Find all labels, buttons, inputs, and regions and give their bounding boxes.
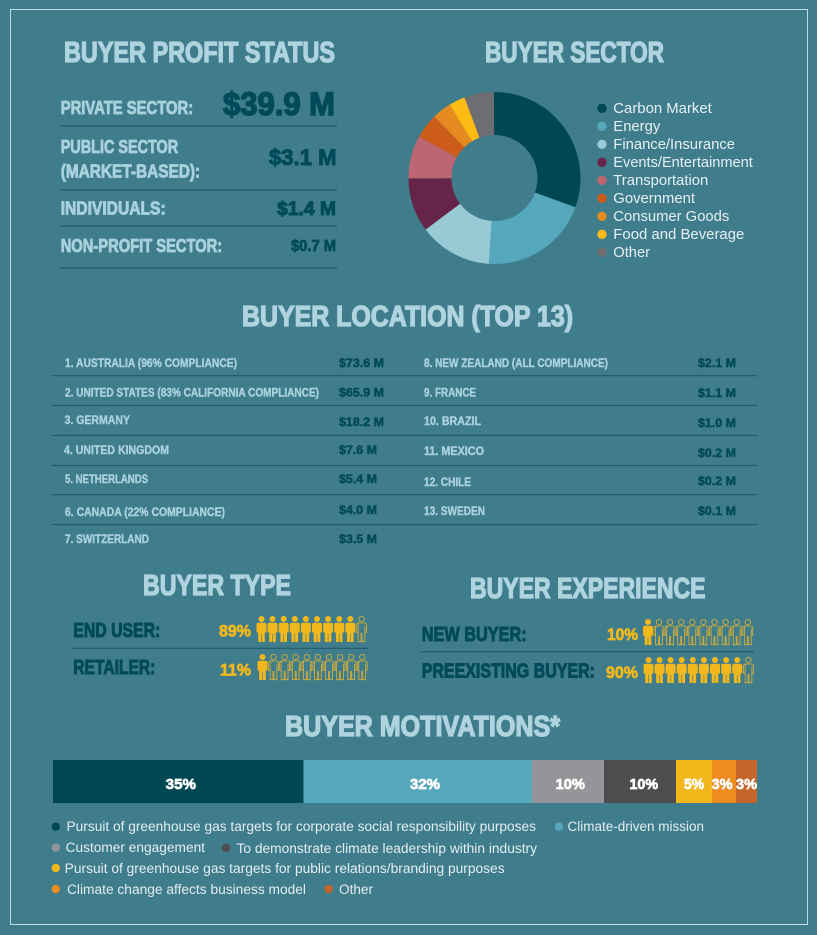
row: preexisting buyer: PREEXISTING BUYER: [422, 661, 595, 683]
legend: sectors: Government [613, 191, 695, 207]
list: countries 1 to 7: 1. AUSTRALIA (96% COMPLIANCE) [65, 358, 237, 370]
list: countries 1 to 7: $3.5 M [339, 532, 377, 546]
legend: sectors: Events/Entertainment [613, 155, 753, 171]
row: non-profit sector: NON-PROFIT SECTOR: [61, 235, 222, 256]
legend: sectors: Transportation [613, 173, 708, 189]
list: countries 1 to 7: 5. NETHERLANDS [65, 474, 148, 486]
heading: buyer experience: BUYER EXPERIENCE [470, 573, 706, 605]
list: countries 8 to 13: $1.0 M [698, 416, 736, 430]
list: countries 1 to 7: 6. CANADA (22% COMPLIANCE) [65, 507, 225, 519]
panel: buyer sector [430, 37, 753, 261]
heading: buyer type: BUYER TYPE [143, 570, 291, 602]
legend: sectors: Carbon Market [613, 101, 712, 117]
row: public sector [61, 136, 336, 182]
heading: buyer sector: BUYER SECTOR [485, 37, 664, 69]
list: countries 1 to 7: $4.0 M [339, 503, 377, 517]
list: countries 1 to 7: 7. SWITZERLAND [65, 534, 149, 546]
legend: sectors: Consumer Goods [613, 209, 729, 225]
legend: motivations: Pursuit of greenhouse gas targets for corporate social responsibility purposes [66, 819, 536, 834]
row: private sector: PRIVATE SECTOR: [61, 97, 193, 118]
row: end user: 89% [219, 622, 251, 641]
heading: buyer location: BUYER LOCATION (TOP 13) [242, 301, 573, 333]
row: individuals: $1.4 M [277, 198, 336, 220]
row: preexisting buyer [422, 657, 753, 683]
legend: motivations: Pursuit of greenhouse gas targets for public relations/branding purposes [65, 861, 505, 876]
row: retailer: 11% [220, 661, 251, 680]
panel: buyer experience [420, 573, 754, 683]
legend: motivations: Customer engagement [66, 840, 205, 855]
list: countries 8 to 13: $0.2 M [698, 474, 736, 488]
row: new buyer: 10% [607, 625, 638, 644]
stacked bar chart: 35% [166, 776, 196, 793]
row: public sector: PUBLIC SECTOR [61, 136, 178, 157]
panel: buyer motivations [52, 711, 757, 897]
stacked bar chart [53, 760, 757, 803]
row: new buyer: NEW BUYER: [422, 624, 527, 646]
row: individuals: INDIVIDUALS: [61, 198, 166, 219]
row: retailer [73, 654, 367, 680]
stacked bar chart: 3% [736, 776, 757, 793]
heading: buyer profit status: BUYER PROFIT STATUS [64, 37, 335, 69]
stacked bar chart: 10% [556, 776, 585, 793]
row: individuals [61, 198, 336, 220]
list: countries 8 to 13: $2.1 M [698, 356, 736, 370]
row: retailer: RETAILER: [73, 657, 155, 679]
list: countries 8 to 13: 11. MEXICO [424, 446, 484, 458]
legend: sectors: Other [613, 245, 650, 261]
legend: motivations: To demonstrate climate leadership within industry [236, 841, 537, 856]
list: countries 8 to 13: 9. FRANCE [424, 388, 476, 400]
list: countries 8 to 13: 12. CHILE [424, 477, 471, 489]
legend: motivations: Climate change affects business model [67, 882, 306, 897]
row: private sector: $39.9 M [223, 86, 335, 122]
list: countries 8 to 13: 8. NEW ZEALAND (ALL COMPLIANCE) [424, 358, 608, 370]
row: private sector [61, 86, 335, 122]
panel: buyer location [52, 301, 757, 546]
list: countries 1 to 7: 4. UNITED KINGDOM [64, 445, 169, 457]
list: countries 8 to 13 [424, 356, 736, 518]
list: countries 8 to 13: $1.1 M [698, 386, 736, 400]
row: public sector: $3.1 M [269, 145, 336, 170]
list: countries 1 to 7: 3. GERMANY [64, 415, 130, 427]
legend: sectors [597, 101, 753, 261]
legend: motivations: Other [339, 882, 374, 897]
panel: buyer type [71, 570, 368, 680]
list: countries 8 to 13: $0.2 M [698, 446, 736, 460]
legend: motivations [52, 819, 704, 897]
row: non-profit sector: $0.7 M [291, 238, 336, 255]
list: countries 1 to 7: $65.9 M [339, 386, 384, 400]
list: countries 1 to 7: $7.6 M [339, 443, 377, 457]
donut chart [430, 114, 559, 242]
list: countries 1 to 7: $73.6 M [339, 356, 384, 370]
list: countries 1 to 7 [64, 356, 384, 546]
list: countries 1 to 7: $18.2 M [339, 415, 384, 429]
row: public sector: (MARKET-BASED): [61, 160, 200, 182]
legend: motivations: Climate-driven mission [568, 819, 704, 834]
list: countries 1 to 7: $5.4 M [339, 472, 377, 486]
stacked bar chart: 5% [684, 776, 704, 793]
row: new buyer [422, 619, 753, 646]
list: countries 1 to 7: 2. UNITED STATES (83% CALIFORNIA COMPLIANCE) [65, 388, 319, 400]
stacked bar chart: 10% [630, 776, 658, 793]
stacked bar chart: 32% [410, 776, 440, 793]
panel: buyer profit status [60, 37, 337, 268]
row: end user [73, 616, 366, 642]
legend: sectors: Food and Beverage [613, 227, 744, 243]
row: end user: END USER: [73, 620, 160, 642]
legend: sectors: Energy [613, 119, 661, 135]
list: countries 8 to 13: 13. SWEDEN [424, 506, 485, 518]
list: countries 8 to 13: $0.1 M [698, 504, 736, 518]
heading: buyer motivations: BUYER MOTIVATIONS* [285, 711, 561, 743]
legend: sectors: Finance/Insurance [613, 137, 735, 153]
list: countries 8 to 13: 10. BRAZIL [424, 416, 481, 428]
stacked bar chart: 3% [712, 776, 732, 793]
row: preexisting buyer: 90% [606, 663, 638, 682]
